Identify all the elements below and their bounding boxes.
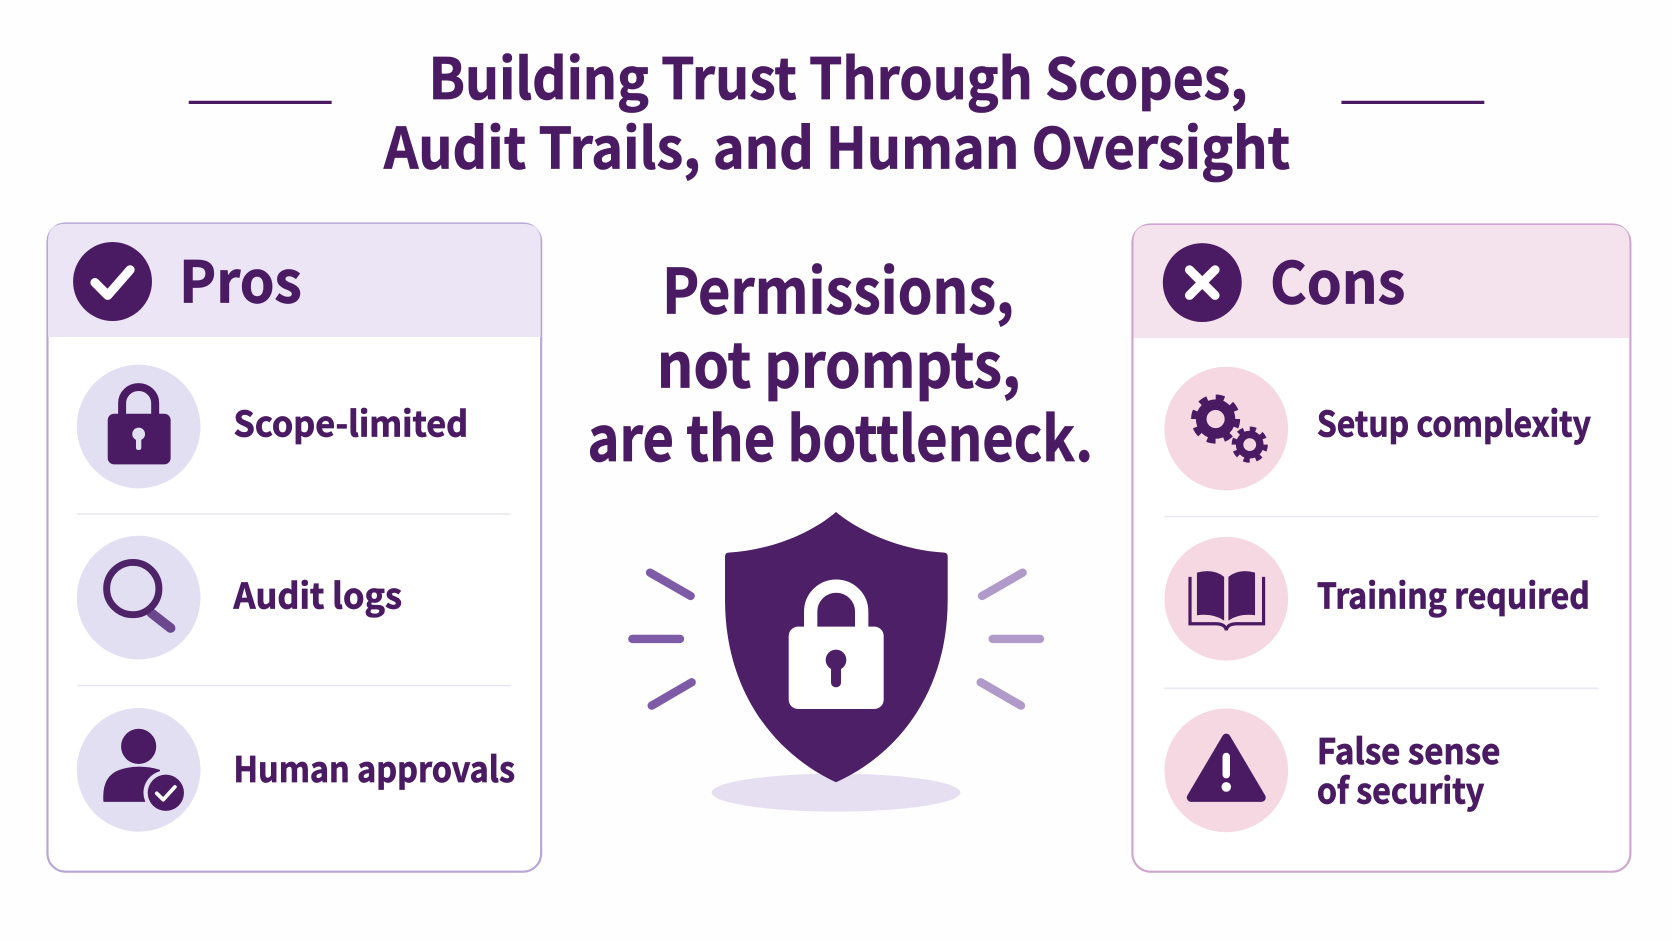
item: false sense of security: False sense xyxy=(1317,724,1500,775)
item: training required: Training required xyxy=(1317,568,1590,619)
item: scope-limited xyxy=(77,365,468,488)
rays right xyxy=(981,573,1040,706)
item: false sense of security xyxy=(1164,709,1500,832)
icon: pros check xyxy=(73,242,152,321)
pros heading: Pros xyxy=(179,235,302,319)
shield shadow xyxy=(712,774,960,812)
item: human approvals xyxy=(77,708,515,832)
central message: are the bottleneck. xyxy=(588,389,1093,479)
item: setup complexity: Setup complexity xyxy=(1317,397,1591,448)
title xyxy=(383,34,1290,185)
title rule right xyxy=(1341,101,1484,104)
item: scope-limited: Scope-limited xyxy=(234,397,468,448)
pros header band xyxy=(48,224,541,337)
panel: pros xyxy=(47,223,541,872)
cons header band xyxy=(1133,225,1629,338)
item: human approvals: Human approvals xyxy=(234,742,515,793)
lock xyxy=(789,586,884,709)
central message: Permissions, xyxy=(662,241,1014,331)
title: Building Trust Through Scopes, xyxy=(429,34,1248,116)
item: false sense of security: of security xyxy=(1317,763,1484,814)
shield body xyxy=(725,512,948,782)
central message xyxy=(588,241,1093,479)
icon: shield with lock xyxy=(632,512,1040,812)
item: audit logs xyxy=(77,536,402,659)
central message: not prompts, xyxy=(657,316,1020,406)
cons heading: Cons xyxy=(1270,236,1405,320)
title rule left xyxy=(189,101,332,104)
item: audit logs: Audit logs xyxy=(233,568,402,619)
icon: cons cross xyxy=(1163,243,1242,322)
rays left xyxy=(632,573,692,706)
item: training required xyxy=(1164,537,1590,661)
title: Audit Trails, and Human Oversight xyxy=(383,103,1290,185)
item: setup complexity xyxy=(1164,367,1591,490)
panel: cons xyxy=(1132,224,1630,872)
